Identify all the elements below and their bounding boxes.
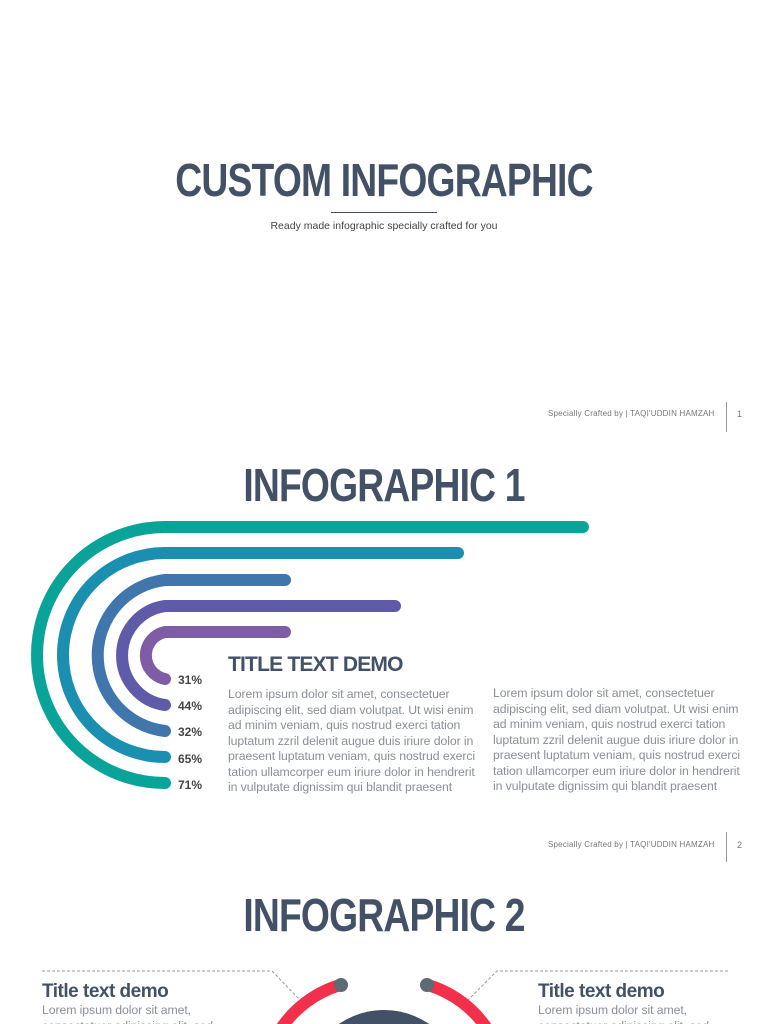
text block right: in vulputate dignissim qui blandit praesent — [493, 779, 717, 793]
text block right: tation ullamcorper eum iriure dolor in hendrerit — [493, 764, 740, 778]
heading infographic 1: INFOGRAPHIC 1 — [243, 459, 525, 511]
text block left — [228, 687, 475, 794]
text: Lorem ipsum dolor sit amet, — [538, 1003, 687, 1017]
panel title: TITLE TEXT DEMO — [228, 653, 403, 676]
arc chart: 32% — [178, 725, 202, 739]
text block right: Lorem ipsum dolor sit amet, consectetuer — [493, 686, 715, 700]
text block left: in vulputate dignissim qui blandit praesent — [228, 780, 452, 794]
arc chart — [31, 521, 589, 792]
text block left: luptatum zzril delenit augue duis iriure dolor in — [228, 734, 473, 748]
credit 2: Specially Crafted by | TAQI'UDDIN HAMZAH — [548, 840, 714, 849]
credit 1 — [548, 402, 742, 432]
text block right — [493, 686, 740, 793]
text block right: adipiscing elit, sed diam volutpat. Ut wisi enim — [493, 702, 738, 716]
text block left: praesent luptatum veniam, quis nostrud exerci — [228, 749, 475, 763]
arc chart: 31% — [178, 673, 202, 687]
title: CUSTOM INFOGRAPHIC — [175, 154, 593, 206]
credit 1: 1 — [737, 409, 742, 419]
text block right: ad minim veniam, quis nostrud exerci tation — [493, 717, 725, 731]
credit 2: 2 — [737, 840, 742, 850]
heading infographic 2: INFOGRAPHIC 2 — [243, 889, 525, 941]
arc chart: 65% — [178, 752, 202, 766]
subtitle: Ready made infographic specially crafted for you — [270, 220, 498, 232]
credit 2 — [548, 832, 742, 862]
right title 2: Title text demo — [538, 981, 664, 1002]
infographic 2 diagram — [42, 970, 728, 1024]
text block right: luptatum zzril delenit augue duis iriure dolor in — [493, 732, 738, 746]
text block left: Lorem ipsum dolor sit amet, consectetuer — [228, 687, 450, 701]
text block left: adipiscing elit, sed diam volutpat. Ut wisi enim — [228, 702, 473, 716]
credit 1: Specially Crafted by | TAQI'UDDIN HAMZAH — [548, 409, 714, 418]
text block left: ad minim veniam, quis nostrud exerci tation — [228, 718, 460, 732]
text: Lorem ipsum dolor sit amet, — [42, 1003, 191, 1017]
arc chart: 44% — [178, 699, 202, 713]
arc chart: 71% — [178, 778, 202, 792]
left title 2: Title text demo — [42, 981, 168, 1002]
text block right: praesent luptatum veniam, quis nostrud exerci — [493, 748, 740, 762]
text block left: tation ullamcorper eum iriure dolor in hendrerit — [228, 764, 475, 778]
